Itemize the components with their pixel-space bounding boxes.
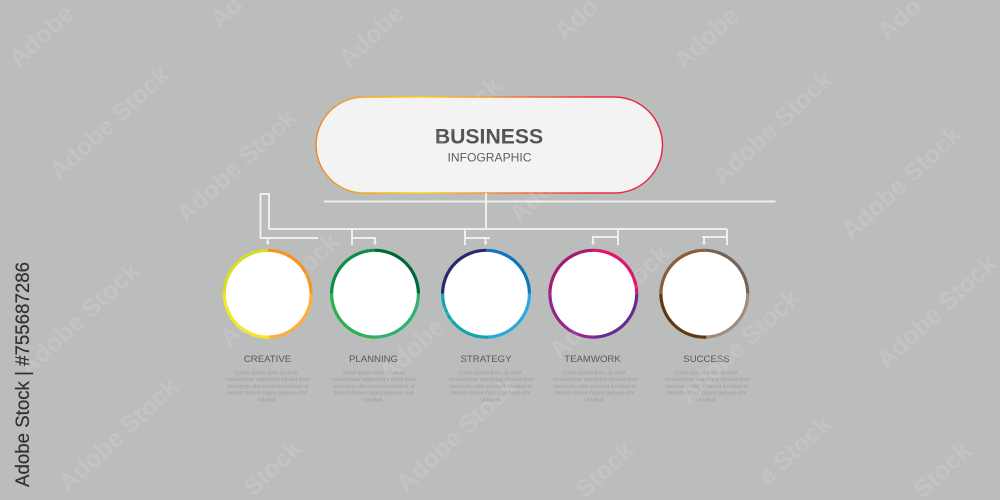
description: creative: laoreet dolore magna aliquam erat [228, 391, 308, 397]
connector network [260, 193, 776, 246]
watermark pattern: Adobe Stock [391, 373, 522, 497]
ring: teamwork [550, 250, 637, 337]
description: strategy: Lorem ipsum dolor sit amet, [459, 370, 523, 376]
description: teamwork: volutpat. [585, 397, 605, 403]
watermark pattern: Adobe [4, 0, 80, 73]
watermark pattern: Adobe Stock [871, 250, 1000, 374]
ring: success [661, 250, 748, 337]
description: strategy: laoreet dolore magna aliquam erat [451, 391, 531, 397]
watermark pattern: e Stock [752, 410, 837, 491]
step: success [661, 250, 749, 403]
label: success: SUCCESS [683, 354, 730, 365]
description: planning: Lorem ipsum dolor sit amet, [341, 370, 406, 376]
watermark pattern: Adobe Stock [707, 66, 838, 190]
description: planning: consectetuer adipiscing elit,sed diam [331, 377, 416, 383]
watermark pattern: Adobe Stock [171, 104, 302, 228]
connector to planning [352, 229, 377, 246]
description: creative: nonummy nibh euismod tincidunt ut [227, 384, 309, 390]
connector to creative [260, 194, 318, 246]
connector to strategy [465, 229, 490, 246]
description: teamwork: nonummy nibh euismod tincidunt ut [554, 384, 636, 390]
description: creative: consectetuer adipiscing elit,sed diam [225, 377, 310, 383]
label: planning: PLANNING [349, 354, 398, 365]
ring: strategy [442, 250, 530, 337]
label: teamwork: TEAMWORK [564, 354, 621, 365]
description: creative: Lorem ipsum dolor sit amet, [235, 370, 300, 376]
step: creative [224, 250, 311, 403]
watermark pattern: Adobe Stock [376, 72, 507, 196]
watermark pattern: Adobe Stock [836, 121, 967, 245]
description: success: volutpat. [697, 397, 717, 403]
description: success: laoreet dolore magna aliquam erat [667, 391, 747, 397]
watermark pattern: Adobe Stock [14, 257, 145, 381]
watermark pattern: Adobe Stock [214, 228, 345, 352]
watermark pattern: Adobe Stock [544, 240, 675, 364]
watermark pattern: Adobe Stock [674, 284, 805, 408]
description: planning: volutpat. [364, 397, 383, 403]
label: strategy: STRATEGY [460, 354, 512, 365]
connector to teamwork [591, 229, 618, 246]
description: strategy: nonummy nibh euismod tincidunt ut [450, 384, 532, 390]
description: strategy: consectetuer adipiscing elit,sed diam [449, 377, 533, 383]
watermark pattern: Adobe Stock [44, 61, 175, 185]
watermark pattern: Adobe Stock [504, 104, 635, 228]
ring: creative [224, 250, 311, 337]
description: planning: nonummy nibh euismod tincidunt ut [333, 384, 415, 390]
top header pill [316, 97, 662, 193]
watermark pattern: Adobe [334, 0, 410, 73]
description: planning: laoreet dolore magna aliquam erat [334, 391, 414, 397]
description: teamwork: consectetuer adipiscing elit,sed diam [553, 377, 637, 383]
watermark pattern: Adobe Stock [374, 262, 505, 386]
description: success: consectetuer adipiscing elit,sed diam [665, 377, 749, 383]
description: success: nonummy nibh euismod tincidunt ut [666, 384, 748, 390]
watermark pattern: Stock [238, 435, 307, 500]
connector to success [702, 229, 727, 246]
subheading: infographic: INFOGRAPHIC [448, 150, 532, 164]
watermark pattern: Adobe Stock [53, 373, 184, 497]
description: success: Lorem ipsum dolor sit amet, [675, 370, 739, 376]
stock credit: Adobe Stock | #755687286 [12, 262, 34, 487]
description: teamwork: Lorem ipsum dolor sit amet, [563, 370, 627, 376]
watermark pattern: Adobe [669, 1, 745, 75]
heading: business: BUSINESS [435, 126, 543, 148]
ring: planning [332, 250, 418, 337]
description: creative: volutpat. [258, 397, 277, 403]
description: strategy: volutpat. [481, 397, 501, 403]
step: strategy [442, 250, 533, 403]
step: teamwork [550, 250, 637, 403]
label: creative: CREATIVE [244, 354, 291, 365]
step: planning [331, 250, 418, 403]
description: teamwork: laoreet dolore magna aliquam erat [555, 391, 635, 397]
